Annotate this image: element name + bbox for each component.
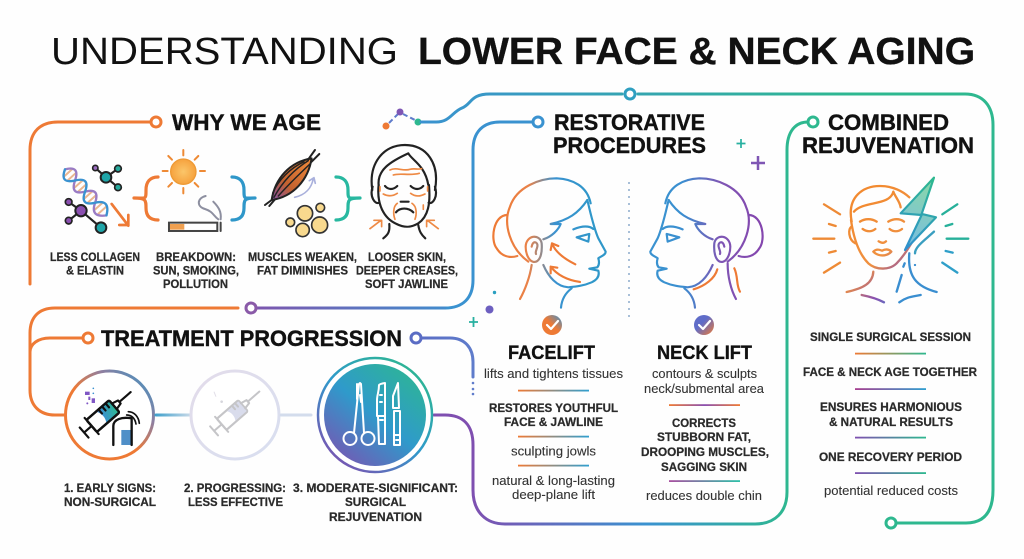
text: benefits list: potential reduced costs [824,484,958,498]
icon: facelift check badge [542,315,562,335]
text: step 1 label: 1. EARLY SIGNS: [64,481,156,495]
heading: restorative procedures: RESTORATIVE [554,110,705,135]
step 3: surgical instruments [318,358,432,472]
link between step 1 and 2 [156,414,190,416]
text: muscles weaken: MUSCLES WEAKEN, [248,250,357,264]
text: less collagen: & ELASTIN [66,264,124,278]
connector: surgical circle around restorative frame [434,117,818,524]
heading: treatment progression: TREATMENT PROGRESSION [101,326,402,351]
text: breakdown: SUN, SMOKING, [153,264,239,278]
text: breakdown: POLLUTION [163,277,228,291]
text: benefits list [803,330,977,498]
title: LOWER FACE & NECK AGING [418,31,975,73]
link between step 2 and 3 [281,414,311,416]
column: neck lift: SAGGING SKIN [661,460,747,474]
title: UNDERSTANDING [51,31,398,73]
text: step 2 label: LESS EFFECTIVE [188,495,283,509]
icon: dna and molecules [60,165,128,233]
text: muscles weaken [248,250,357,278]
column: neck lift [641,343,769,503]
icon: muscle [265,150,319,206]
panel: treatment progression [64,326,458,524]
text: looser skin [356,250,458,291]
column: facelift [484,343,623,502]
icon: neck lift check badge [694,315,714,335]
divider: dotted line between profiles [628,182,630,322]
icon: sun [163,150,205,193]
column: neck lift: STUBBORN FAT, [657,430,751,444]
heading: facelift: FACELIFT [508,343,595,364]
heading: restorative procedures [553,110,706,158]
panel: combined rejuvenation [802,110,977,498]
text: step 2 label [184,481,286,509]
connector: treatment to restorative dots [411,333,474,395]
text: step 2 label: 2. PROGRESSING: [184,481,286,495]
icon: facelift profile [493,178,606,308]
text: breakdown [153,250,239,291]
column: neck lift: neck/submental area [644,382,764,396]
column: neck lift: DROOPING MUSCLES, [641,445,769,459]
icon: glowing face with lightning bolt [813,178,968,302]
text: looser skin: SOFT JAWLINE [365,277,448,291]
text: step 3 label: 3. MODERATE-SIGNIFICANT: [293,481,458,495]
text: breakdown: BREAKDOWN: [156,250,236,264]
text: benefits list: ONE RECOVERY PERIOD [819,450,962,464]
icon: decorative plus signs and dots [469,139,765,327]
icon: green brace [336,177,360,220]
icon: neck lift profile [650,178,763,308]
heading: neck lift: NECK LIFT [657,343,752,364]
heading: combined rejuvenation: COMBINED [828,110,949,135]
text: less collagen: LESS COLLAGEN [50,250,140,264]
icon: fat cells [286,203,328,237]
column: neck lift: CORRECTS [672,416,736,430]
text: benefits list: FACE & NECK AGE TOGETHER [803,365,977,379]
panel: why we age [50,110,458,291]
text: step 3 label: SURGICAL [345,495,406,509]
text: benefits list: & NATURAL RESULTS [829,415,953,429]
text: step 3 label: REJUVENATION [329,510,422,524]
icon: aged face [370,145,438,238]
column: facelift: RESTORES YOUTHFUL [489,401,618,415]
text: step 3 label [293,481,458,524]
text: benefits list: SINGLE SURGICAL SESSION [810,330,971,344]
connector: why we age frame [30,117,161,284]
heading: why we age: WHY WE AGE [172,110,321,135]
title [51,31,975,73]
text: benefits list: ENSURES HARMONIOUS [820,400,962,414]
column: facelift: lifts and tightens tissues [484,367,623,381]
step 1: non-surgical syringe [66,371,154,459]
heading: combined rejuvenation [802,110,974,158]
column: neck lift: reduces double chin [646,489,762,503]
step 2: progressing syringe [191,371,279,459]
column: facelift: natural & long-lasting [492,474,615,488]
icon: blue brace [232,177,255,220]
connector: treatment frame [30,308,238,415]
text: muscles weaken: FAT DIMINISHES [257,264,348,278]
column: neck lift: contours & sculpts [652,367,757,381]
icon: cigarette [169,196,221,231]
panel: restorative procedures [469,110,769,503]
connector: top line into combined frame [382,89,993,528]
heading: combined rejuvenation: REJUVENATION [802,133,974,158]
column: facelift: sculpting jowls [511,444,596,458]
connector: restorative frame to mid line [246,117,543,313]
column: facelift: deep-plane lift [512,488,596,502]
column: facelift: FACE & JAWLINE [504,415,603,429]
icon: orange brace [134,177,158,220]
text: looser skin: LOOSER SKIN, [368,250,446,264]
text: step 1 label: NON-SURGICAL [64,495,156,509]
text: looser skin: DEEPER CREASES, [356,264,458,278]
heading: restorative procedures: PROCEDURES [553,133,706,158]
text: step 1 label [64,481,156,509]
text: less collagen [50,250,140,278]
